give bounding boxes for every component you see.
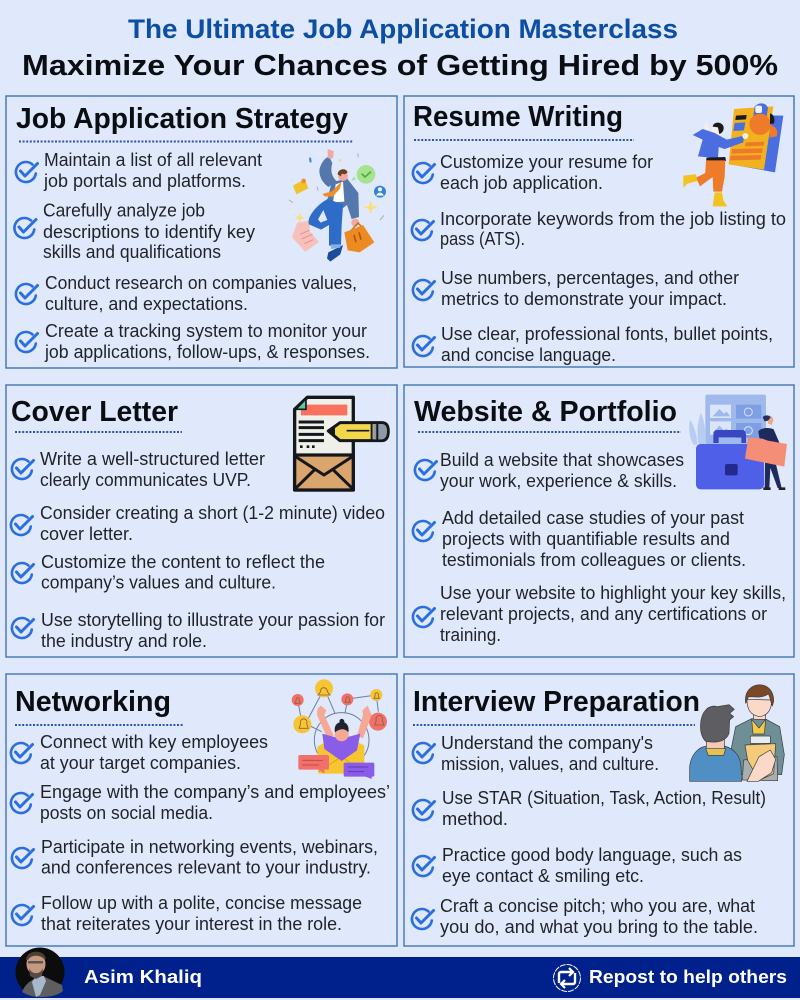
title: Maximize Your Chances of Getting Hired by 500% bbox=[22, 50, 778, 82]
bullet: customize resume: Customize your resume for bbox=[440, 152, 653, 172]
bullet: keywords bbox=[412, 209, 786, 249]
bullet: video letter: Consider creating a short (1-2 minute) video bbox=[40, 503, 385, 523]
panel: networking bbox=[6, 674, 397, 946]
bullet: keywords: pass (ATS). bbox=[440, 229, 525, 249]
bullet: metrics: metrics to demonstrate your impact. bbox=[441, 289, 727, 309]
bullet: follow up bbox=[12, 893, 362, 934]
bullet: structured letter: Write a well-structured letter bbox=[40, 449, 265, 469]
bullet: case studies: Add detailed case studies of your past bbox=[442, 508, 744, 528]
bullet: fonts bbox=[413, 324, 773, 365]
bullet: analyze descriptions bbox=[14, 200, 255, 262]
bullet: customize resume bbox=[413, 152, 653, 193]
icon: interview between two people bbox=[690, 685, 784, 781]
bullet: understand company: Understand the company's bbox=[441, 733, 653, 753]
bullet: engage: posts on social media. bbox=[40, 803, 213, 823]
bullet: events bbox=[12, 837, 378, 878]
bullet: customize resume: each job application. bbox=[440, 173, 603, 193]
panel: website and portfolio bbox=[404, 385, 794, 657]
bullet: connect bbox=[11, 732, 268, 773]
bullet: storytelling: Use storytelling to illustrate your passion for bbox=[41, 610, 385, 630]
bullet: follow up: Follow up with a polite, concise message bbox=[41, 893, 362, 913]
panel: cover letter bbox=[6, 385, 397, 657]
bullet: pitch bbox=[412, 896, 758, 937]
repost call to action: Repost to help others bbox=[589, 966, 787, 987]
bullet: body language bbox=[413, 845, 742, 886]
bullet: pitch: you do, and what you bring to the table. bbox=[440, 917, 758, 937]
bullet: understand company bbox=[413, 733, 659, 774]
bullet: job portals: job portals and platforms. bbox=[43, 171, 246, 191]
title bbox=[22, 14, 778, 82]
bullet: events: Participate in networking events, webinars, bbox=[41, 837, 378, 857]
bullet: key skills: Use your website to highlight your key skills, bbox=[440, 583, 786, 603]
bullet: tracking system: Create a tracking system to monitor your bbox=[45, 321, 367, 341]
bullet: structured letter: clearly communicates UVP. bbox=[40, 470, 251, 490]
author name: Asim Khaliq bbox=[84, 966, 202, 987]
heading: networking: Networking bbox=[15, 686, 171, 718]
bullet: keywords: Incorporate keywords from the job listing to bbox=[440, 209, 786, 229]
icon: portfolio briefcase and person bbox=[689, 395, 787, 490]
bullet: case studies bbox=[413, 508, 746, 570]
bullet: events: and conferences relevant to your industry. bbox=[41, 858, 371, 878]
bullet: connect: Connect with key employees bbox=[40, 732, 268, 752]
bullet: storytelling: the industry and role. bbox=[41, 631, 207, 651]
icon: repost bbox=[554, 964, 580, 992]
panel: job application strategy bbox=[6, 96, 397, 368]
bullet: research companies: culture, and expectations. bbox=[45, 294, 248, 314]
bullet: customize content bbox=[12, 552, 325, 592]
heading: cover letter: Cover Letter bbox=[11, 396, 178, 428]
heading: resume writing: Resume Writing bbox=[413, 101, 623, 133]
bullet: key skills: training. bbox=[440, 625, 501, 645]
bullet: STAR method: method. bbox=[442, 809, 508, 829]
bullet: website bbox=[415, 450, 684, 491]
bullet: analyze descriptions: descriptions to identify key bbox=[43, 222, 255, 242]
bullet: job portals bbox=[16, 150, 262, 191]
bullet: case studies: testimonials from colleagues or clients. bbox=[442, 550, 746, 570]
icon: jumping businessman bbox=[289, 149, 386, 262]
bullet: body language: eye contact & smiling etc. bbox=[442, 866, 644, 886]
icon: letter, envelope and pencil bbox=[295, 397, 388, 490]
heading: website and portfolio: Website & Portfolio bbox=[414, 396, 677, 428]
heading: interview preparation: Interview Preparation bbox=[413, 686, 700, 718]
bullet: analyze descriptions: skills and qualifications bbox=[43, 242, 221, 262]
bullet: fonts: Use clear, professional fonts, bullet points, bbox=[441, 324, 773, 344]
footer bar bbox=[0, 948, 800, 998]
icon: person with resume bbox=[683, 103, 783, 206]
bullet: structured letter bbox=[12, 449, 265, 490]
bullet: website: Build a website that showcases bbox=[440, 450, 684, 470]
bullet: website: your work, experience & skills. bbox=[440, 471, 677, 491]
bullet: key skills bbox=[413, 583, 786, 645]
bullet: metrics: Use numbers, percentages, and other bbox=[441, 268, 739, 288]
bullet: metrics bbox=[413, 268, 739, 309]
bullet: tracking system: job applications, follow-ups, & responses. bbox=[44, 342, 370, 362]
bullet: body language: Practice good body language, such as bbox=[442, 845, 742, 865]
bullet: storytelling bbox=[12, 610, 385, 651]
bullet: connect: at your target companies. bbox=[40, 753, 241, 773]
bullet: research companies: Conduct research on companies values, bbox=[45, 273, 357, 293]
bullet: customize content: company’s values and culture. bbox=[41, 572, 276, 592]
bullet: case studies: projects with quantifiable results and bbox=[442, 529, 730, 549]
bullet: engage: Engage with the company’s and employees’ bbox=[40, 782, 390, 802]
bullet: analyze descriptions: Carefully analyze job bbox=[43, 200, 205, 220]
bullet: job portals: Maintain a list of all relevant bbox=[44, 150, 262, 170]
title: The Ultimate Job Application Masterclass bbox=[128, 14, 678, 44]
icon: woman with network bbox=[292, 679, 387, 779]
bullet: STAR method: Use STAR (Situation, Task, Action, Result) bbox=[442, 788, 766, 808]
panel: resume writing bbox=[404, 96, 794, 367]
bullet: follow up: that reiterates your interest in the role. bbox=[41, 914, 342, 934]
bullet: tracking system bbox=[16, 321, 370, 362]
bullet: pitch: Craft a concise pitch; who you are, what bbox=[440, 896, 755, 916]
bullet: research companies bbox=[16, 273, 357, 314]
bullet: STAR method bbox=[413, 788, 766, 829]
bullet: fonts: and concise language. bbox=[441, 345, 616, 365]
heading: job application strategy: Job Application Strategy bbox=[16, 103, 348, 135]
bullet: understand company: mission, values, and culture. bbox=[441, 754, 659, 774]
panel: interview preparation bbox=[404, 674, 794, 946]
bullet: customize content: Customize the content to reflect the bbox=[41, 552, 325, 572]
photo: Asim Khaliq bbox=[16, 948, 64, 997]
bullet: video letter bbox=[11, 503, 385, 544]
bullet: key skills: relevant projects, and any certifications or bbox=[440, 604, 767, 624]
bullet: video letter: cover letter. bbox=[40, 524, 133, 544]
bullet: engage bbox=[11, 782, 390, 823]
